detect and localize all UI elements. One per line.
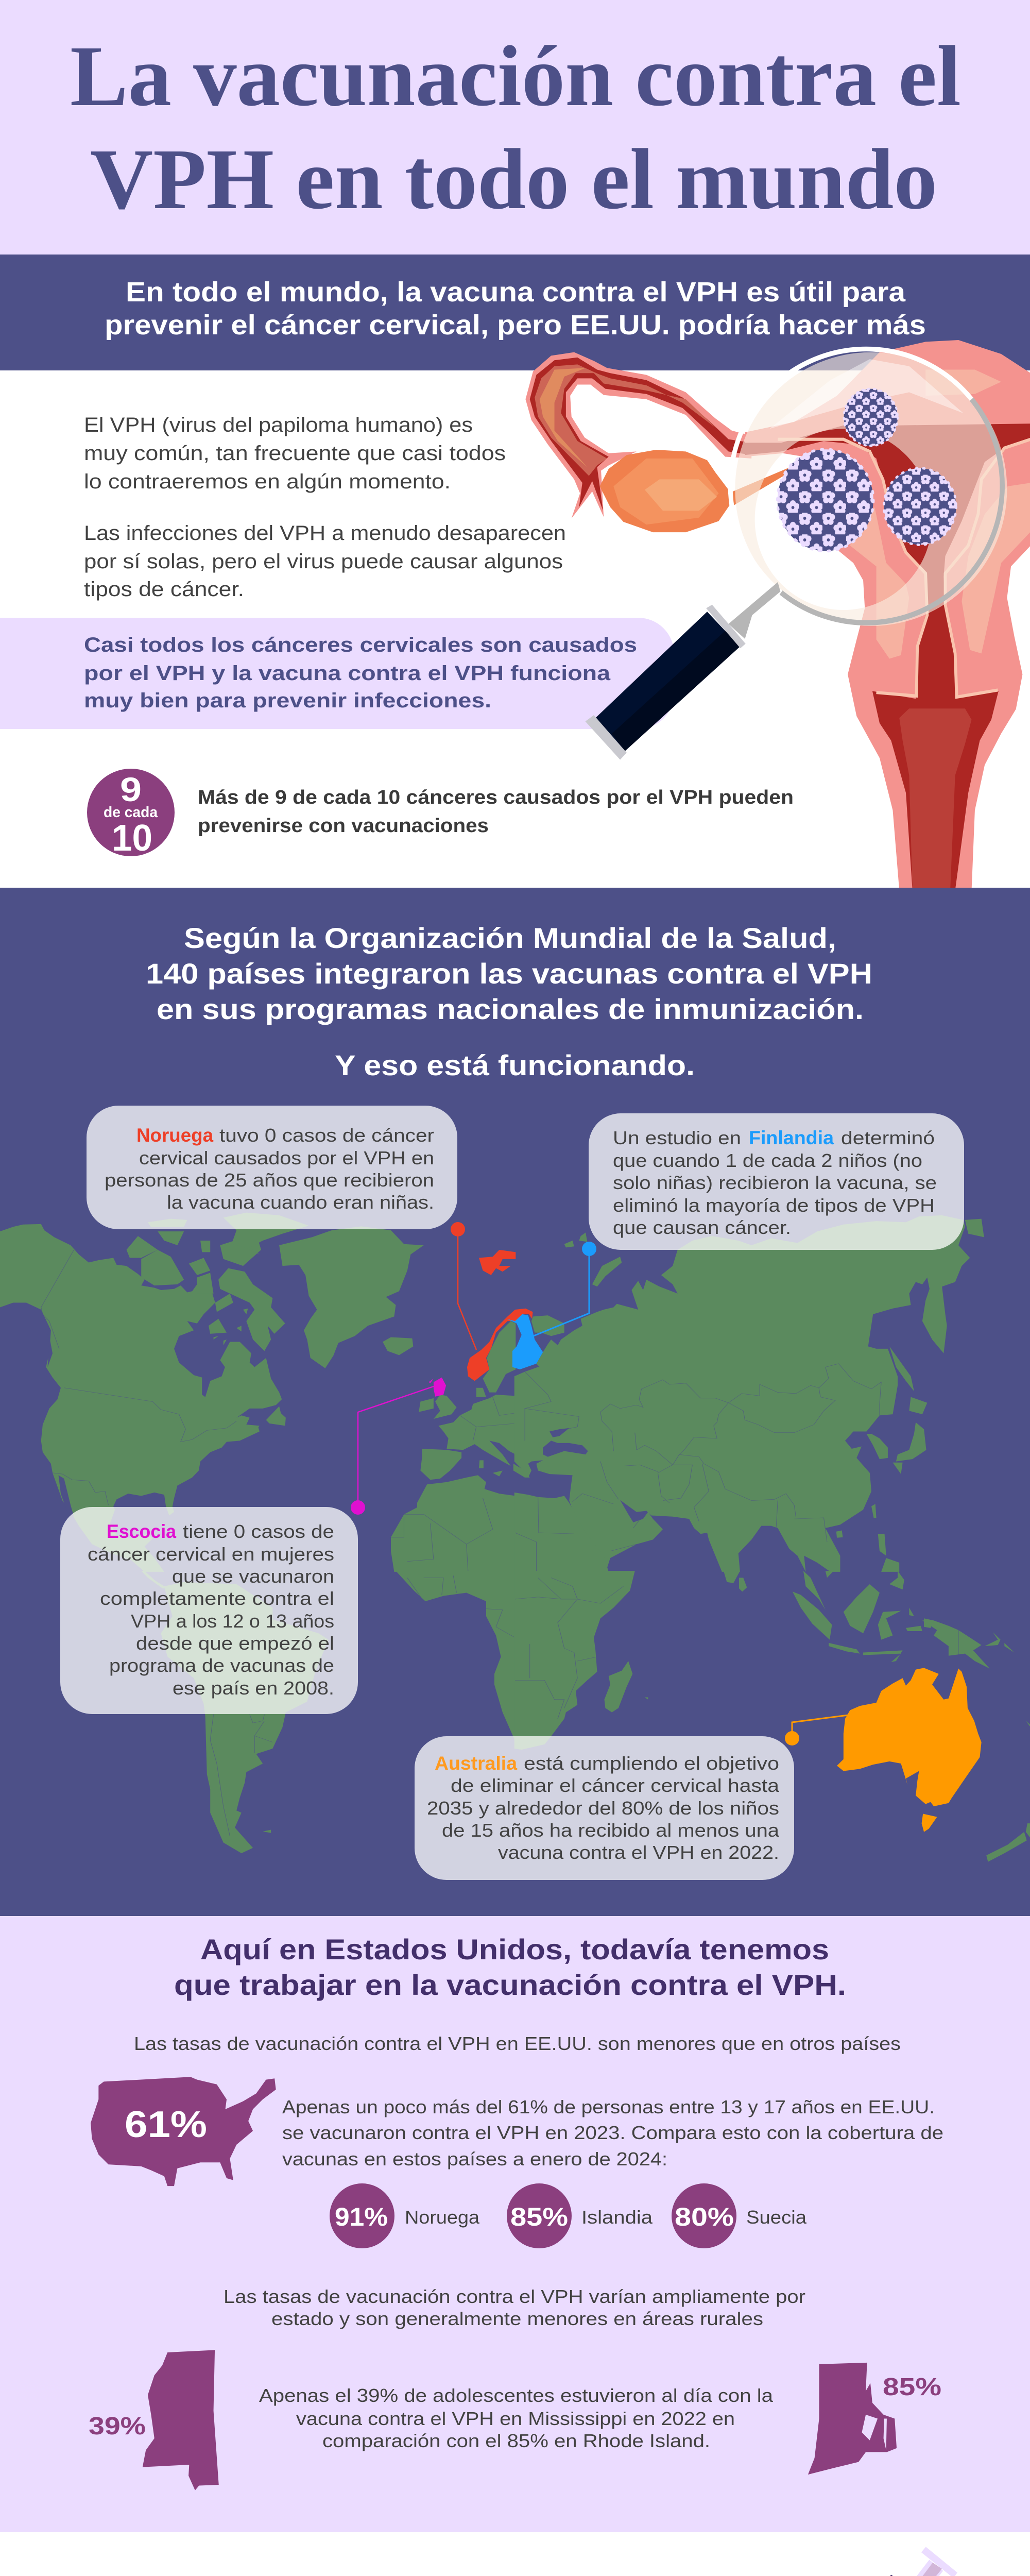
heading: WHO statement: 140 países integraron las vacunas contra el VPH <box>146 957 872 990</box>
callout: Escocia: cáncer cervical en mujeres <box>88 1544 334 1565</box>
text: lower than other countries: Las tasas de vacunación contra el VPH en EE.UU. son menores que en otros países <box>134 2033 901 2054</box>
ovary <box>600 450 794 532</box>
heading: WHO statement: Según la Organización Mundial de la Salud, <box>184 922 836 954</box>
text: 61 percent explanation: vacunas en estos países a enero de 2024: <box>282 2148 667 2170</box>
text block: intro on HPV: El VPH (virus del papiloma humano) es <box>84 414 473 436</box>
text: rates vary by state: Las tasas de vacunación contra el VPH varían ampliamente por <box>224 2286 805 2307</box>
icon: 9 de cada 10 badge: 10 <box>112 818 152 859</box>
text: 61 percent explanation: Apenas un poco más del 61% de personas entre 13 y 17 años en EE.UU. <box>282 2096 935 2117</box>
heading: US work: que trabajar en la vacunación contra el VPH. <box>174 1969 846 2001</box>
panel: global vaccination map section <box>0 888 1030 1916</box>
callout: Finlandia: Finlandia <box>749 1127 834 1148</box>
text: 61 percent explanation <box>282 2096 943 2170</box>
icon: USA map 61%: 61% <box>125 2104 207 2145</box>
pointer: Finlandia <box>534 1242 596 1336</box>
callout: vaccine works <box>0 618 674 729</box>
callout: Escocia: tiene 0 casos de <box>183 1521 334 1542</box>
illustration: uterus with magnifying glass and HPV particles <box>525 340 1030 890</box>
title: La vacunación contra el <box>70 28 961 124</box>
text block: 9 of 10 statement: Más de 9 de cada 10 cánceres causados por el VPH pueden <box>198 787 794 808</box>
subtitle heading <box>105 277 926 341</box>
heading: US work <box>174 1933 846 2001</box>
callout: Noruega <box>87 1106 457 1229</box>
magnifying glass rim and handle <box>585 349 1002 760</box>
text block: intro on HPV: Las infecciones del VPH a menudo desaparecen <box>84 522 566 545</box>
stat: Islandia 85%: Islandia <box>581 2207 653 2228</box>
callout: Finlandia: solo niñas) recibieron la vacuna, se <box>613 1172 937 1193</box>
text block: intro on HPV <box>84 414 566 601</box>
text: Mississippi vs Rhode Island: Apenas el 39% de adolescentes estuvieron al día con la <box>259 2385 774 2406</box>
text block: intro on HPV: por sí solas, pero el virus puede causar algunos <box>84 550 563 573</box>
stat: Noruega 91% <box>330 2183 480 2248</box>
callout: Finlandia: eliminó la mayoría de tipos de VPH <box>613 1195 935 1216</box>
callout: Noruega: tuvo 0 casos de cáncer <box>219 1125 434 1146</box>
pointer: Escocia <box>351 1386 434 1515</box>
callout: Finlandia <box>589 1113 964 1250</box>
text: rates vary by state <box>224 2286 805 2329</box>
icon: Mississippi 39%: 39% <box>89 2413 146 2440</box>
callout: Australia: de eliminar el cáncer cervical hasta <box>451 1775 780 1796</box>
callout: Finlandia: determinó <box>841 1127 935 1148</box>
callout: Escocia: Escocia <box>107 1521 176 1542</box>
stat: Islandia 85%: 85% <box>510 2202 568 2231</box>
icon: USA map 61% <box>91 2077 276 2186</box>
text block: intro on HPV: muy común, tan frecuente que casi todos <box>84 442 506 465</box>
callout: Finlandia: que cuando 1 de cada 2 niños (no <box>613 1150 922 1171</box>
callout: Australia: 2035 y alrededor del 80% de los niños <box>427 1798 779 1819</box>
panel: United States section <box>0 1916 1030 2532</box>
callout: Escocia: programa de vacunas de <box>109 1655 334 1676</box>
pointer: Noruega <box>451 1222 476 1350</box>
world map <box>0 1213 1030 1862</box>
heading: WHO statement: en sus programas nacionales de inmunización. <box>157 993 864 1025</box>
callout: Australia: Australia <box>435 1753 517 1774</box>
heading: WHO statement: Y eso está funcionando. <box>335 1049 695 1081</box>
text: rates vary by state: estado y son generalmente menores en áreas rurales <box>271 2308 763 2329</box>
text block: intro on HPV: lo contraeremos en algún momento. <box>84 470 451 493</box>
callout: Escocia: VPH a los 12 o 13 años <box>131 1611 334 1632</box>
panel: subtitle band <box>0 255 1030 370</box>
text: Mississippi vs Rhode Island <box>259 2385 774 2451</box>
text block: 9 of 10 statement: prevenirse con vacunaciones <box>198 815 489 837</box>
text: Mississippi vs Rhode Island: comparación con el 85% en Rhode Island. <box>322 2430 710 2451</box>
callout: Noruega: personas de 25 años que recibieron <box>105 1170 434 1191</box>
icon: Rhode Island 85%: 85% <box>883 2374 941 2401</box>
stat: Suecia 80% <box>672 2183 807 2248</box>
callout: Noruega: Noruega <box>136 1125 213 1146</box>
callout: Escocia: desde que empezó el <box>136 1633 334 1654</box>
stat: Suecia 80%: Suecia <box>746 2207 807 2228</box>
icon: Mississippi 39% <box>89 2350 219 2490</box>
title: VPH en todo el mundo <box>90 131 937 227</box>
Scotland <box>428 1378 446 1397</box>
Australia <box>837 1668 982 1832</box>
text block: 9 of 10 statement <box>198 787 794 837</box>
stat: Suecia 80%: 80% <box>675 2202 734 2231</box>
subtitle heading: prevenir el cáncer cervical, pero EE.UU. podría hacer más <box>105 310 926 341</box>
callout: Escocia: que se vacunaron <box>172 1566 334 1587</box>
icon: 9 de cada 10 badge: de cada <box>104 804 158 821</box>
callout: Australia: de 15 años ha recibido al menos una <box>442 1820 780 1841</box>
icon: 9 de cada 10 badge <box>87 769 175 859</box>
fallopian tube <box>525 352 751 518</box>
subtitle heading: En todo el mundo, la vacuna contra el VPH es útil para <box>126 277 906 308</box>
icon: syringe <box>756 2547 957 2576</box>
panel: title header <box>0 0 1030 255</box>
icon: Rhode Island 85% <box>808 2363 941 2475</box>
callout: vaccine works: Casi todos los cánceres cervicales son causados <box>84 634 637 656</box>
callout: vaccine works: por el VPH y la vacuna contra el VPH funciona <box>84 662 611 685</box>
callout: Escocia <box>60 1507 358 1714</box>
icon: 9 de cada 10 badge: 9 <box>120 770 142 808</box>
callout: Noruega: la vacuna cuando eran niñas. <box>167 1192 434 1213</box>
Norway and Svalbard <box>467 1250 533 1381</box>
highlighted countries <box>428 1250 982 1832</box>
callout: Australia <box>415 1736 794 1880</box>
callout: Australia: vacuna contra el VPH en 2022. <box>498 1842 779 1863</box>
HPV particles <box>778 389 956 551</box>
stat: Noruega 91%: 91% <box>335 2202 388 2231</box>
callout: Australia: está cumpliendo el objetivo <box>524 1753 779 1774</box>
pointer: Australia <box>785 1715 848 1745</box>
title <box>70 28 961 227</box>
callout: Escocia: ese país en 2008. <box>173 1677 334 1699</box>
callout: Finlandia: que causan cáncer. <box>613 1217 791 1238</box>
callout: Noruega: cervical causados por el VPH en <box>139 1147 434 1168</box>
lens <box>735 352 1007 626</box>
heading: US work: Aquí en Estados Unidos, todavía tenemos <box>200 1933 829 1965</box>
callout: Escocia: completamente contra el <box>100 1588 334 1609</box>
text: Mississippi vs Rhode Island: vacuna contra el VPH en Mississippi en 2022 en <box>296 2408 735 2429</box>
callout: vaccine works: muy bien para prevenir infecciones. <box>84 689 491 712</box>
stat: Noruega 91%: Noruega <box>405 2207 480 2228</box>
stat: Islandia 85% <box>507 2183 653 2248</box>
heading: WHO statement <box>146 922 872 1081</box>
text: 61 percent explanation: se vacunaron contra el VPH en 2023. Compara esto con la cobertura de <box>282 2122 943 2143</box>
callout: Finlandia: Un estudio en <box>613 1127 741 1148</box>
text block: intro on HPV: tipos de cáncer. <box>84 578 244 601</box>
uterus body <box>745 340 1030 890</box>
Finland <box>507 1314 543 1369</box>
